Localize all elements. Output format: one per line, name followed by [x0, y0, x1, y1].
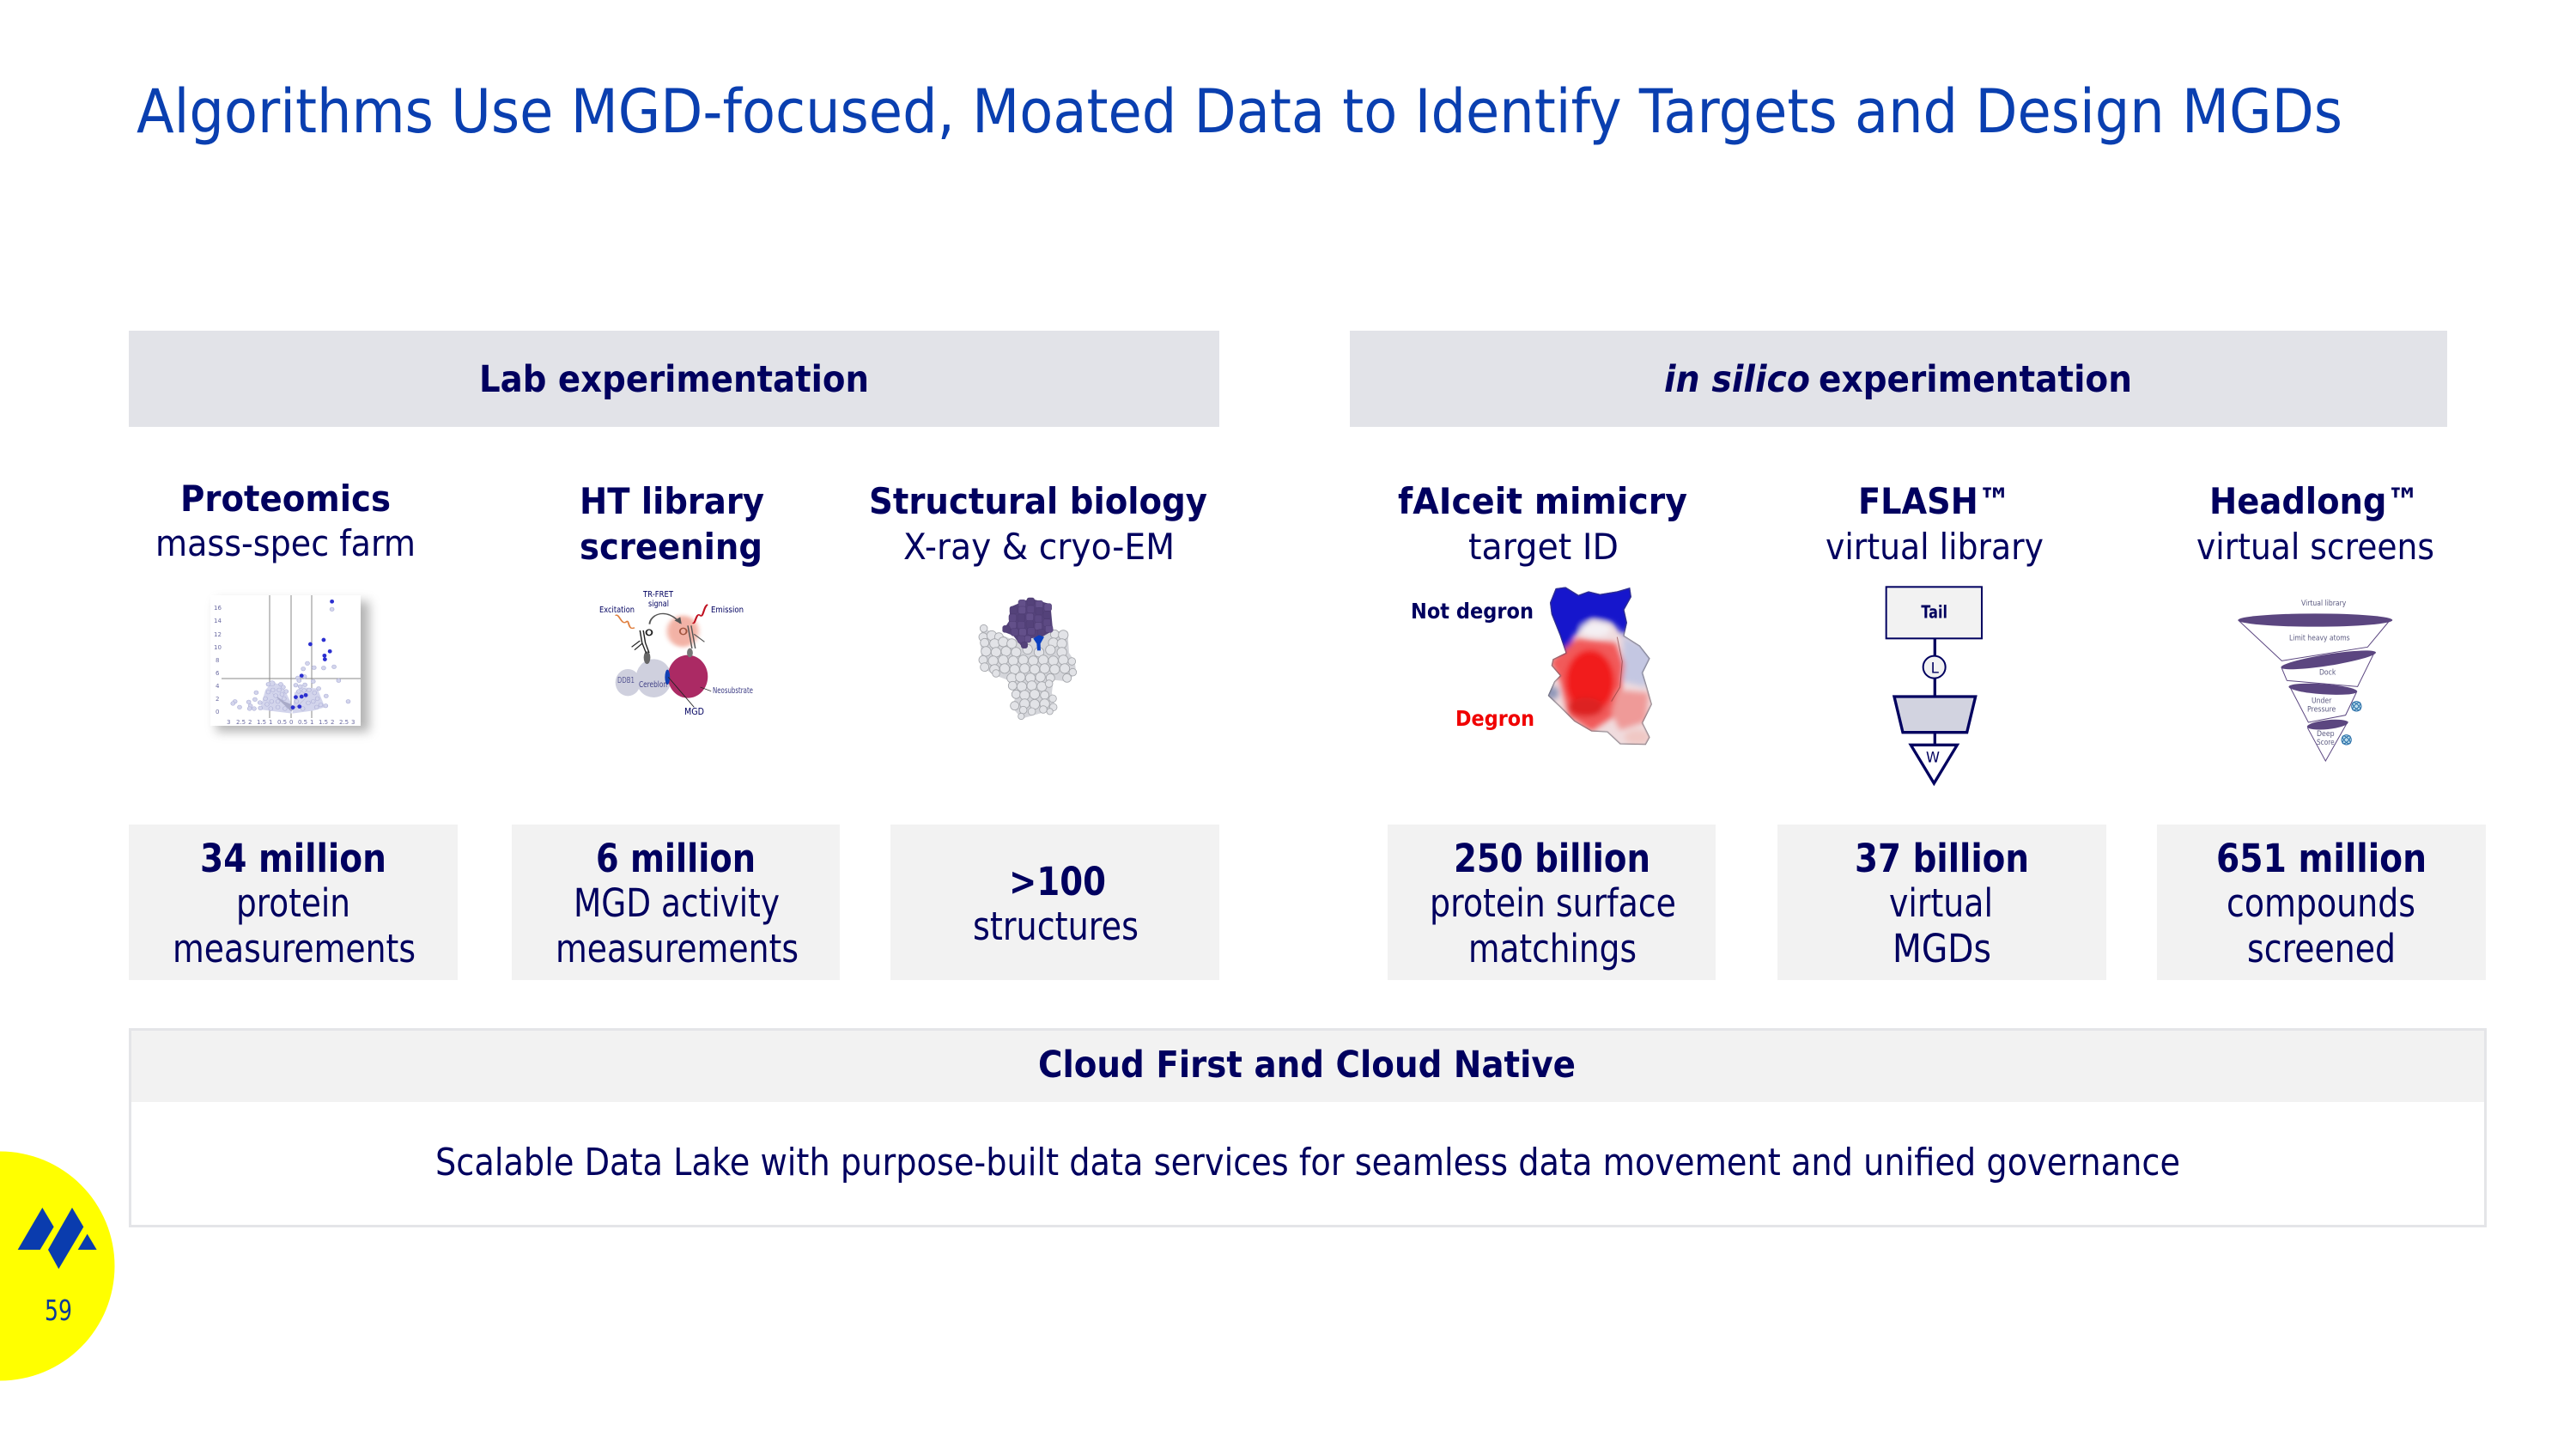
icon: virtual screening funnel: Pressure [2307, 706, 2336, 715]
icon: TR-FRET assay diagram: Emission [711, 606, 744, 615]
icon: TR-FRET assay diagram: DDB1 [617, 676, 635, 685]
icon: FLASH molecule schematic [1886, 587, 1982, 783]
column heading: Headlong [2196, 480, 2434, 568]
icon: volcano plot: 0.5 [277, 719, 287, 726]
icon: volcano plot: 1 [310, 719, 313, 726]
heading: cloud first and cloud native: Cloud First and Cloud Native [1038, 1044, 1576, 1087]
stat box: 651 million: 651 million [2216, 836, 2427, 881]
column heading: HT library screening: screening [580, 526, 762, 568]
stat box: 250 billion: protein surface [1430, 880, 1676, 926]
stat box: 37 billion: virtual [1889, 880, 1993, 926]
icon: electrostatic surface with degron labels [1413, 587, 1652, 746]
stat box: 34 million: protein [236, 880, 350, 926]
linker circle [1923, 656, 1946, 679]
column heading: structural biology: Structural biology [869, 480, 1207, 522]
icon: TR-FRET assay diagram: signal [648, 600, 669, 609]
heading: in silico experimentation: experimentation [1819, 358, 2132, 401]
column heading: structural biology [869, 480, 1207, 568]
icon: virtual screening funnel: Limit heavy atoms [2289, 635, 2350, 643]
icon: volcano plot: 2.5 [236, 719, 246, 726]
icon: volcano plot: 1 [269, 719, 272, 726]
stat box: 37 billion: 37 billion [1855, 836, 2029, 881]
icon: volcano plot: 1.5 [319, 719, 328, 726]
column heading: FLASH: FLASH™ [1858, 480, 2011, 522]
icon: virtual screening funnel: Dock [2319, 669, 2336, 678]
icon: company logo [18, 1208, 97, 1269]
column heading: proteomics [155, 478, 416, 564]
column heading: fAIceit mimicry: fAIceit mimicry [1398, 480, 1687, 522]
label: degron: Degron [1455, 706, 1534, 731]
stat box: more than 100: structures [973, 904, 1139, 949]
icon: TR-FRET assay diagram: Cereblon [639, 680, 667, 690]
stat box: 6 million [512, 825, 840, 980]
column heading: proteomics: mass-spec farm [155, 522, 416, 564]
icon: TR-FRET assay diagram: MGD [684, 706, 704, 717]
page number: 59 [45, 1294, 72, 1327]
stat box: 250 billion: 250 billion [1454, 836, 1650, 881]
icon: protein structure [979, 598, 1077, 720]
icon: volcano plot [210, 595, 369, 732]
icon: volcano plot: 2 [331, 719, 334, 726]
icon: volcano plot: 3 [227, 719, 230, 726]
icon: volcano plot: 16 [214, 605, 222, 612]
panel: lab experimentation header [129, 331, 1219, 427]
icon: volcano plot: 0 [289, 719, 293, 726]
column heading: FLASH: virtual library [1826, 526, 2044, 568]
warhead triangle [1911, 745, 1957, 783]
icon: virtual screening funnel: Score [2317, 739, 2335, 747]
icon: virtual screening funnel: Virtual library [2301, 600, 2346, 608]
stat box: more than 100: >100 [1009, 859, 1106, 904]
column heading: Headlong: Headlong™ [2209, 480, 2420, 522]
warhead triangle: W [1926, 749, 1940, 765]
column heading: structural biology: X-ray & cryo-EM [903, 526, 1175, 568]
icon: volcano plot: 10 [214, 644, 222, 651]
icon: volcano plot: 6 [216, 670, 220, 677]
label: not degron: Not degron [1411, 599, 1534, 624]
stat box: 6 million: 6 million [596, 836, 756, 881]
icon: volcano plot: 0 [216, 709, 219, 715]
stat box: 651 million [2157, 825, 2486, 980]
icon: TR-FRET assay diagram: Neosubstrate [713, 686, 753, 696]
column heading: HT library screening: HT library [580, 480, 764, 522]
icon: volcano plot: 3 [351, 719, 355, 726]
heading: in silico experimentation: in silico [1664, 358, 1810, 401]
icon: TR-FRET assay diagram: TR-FRET [642, 590, 674, 600]
title: Algorithms Use MGD-focused, Moated Data to Identify Targets and Design MGDs [137, 76, 2342, 147]
icon: volcano plot: 0.5 [298, 719, 307, 726]
stat box: 6 million: measurements [556, 926, 799, 971]
icon: volcano plot: 2 [216, 696, 219, 703]
column heading: proteomics: Proteomics [180, 478, 391, 520]
column heading: fAIceit mimicry: target ID [1468, 526, 1619, 568]
stat box: 37 billion [1777, 825, 2106, 980]
column heading: fAIceit mimicry [1398, 480, 1687, 568]
heading: in silico experimentation [1664, 358, 2132, 401]
icon: volcano plot: 8 [216, 657, 219, 664]
column heading: FLASH [1826, 480, 2044, 568]
stat box: 250 billion: matchings [1468, 926, 1637, 971]
panel: cloud first and cloud native [131, 1029, 2485, 1227]
panel: in silico experimentation header [1350, 331, 2447, 427]
icon: virtual screening funnel: Deep [2317, 730, 2335, 739]
text: scalable data lake: Scalable Data Lake with purpose-built data services for seamless data movement and unified governance [435, 1141, 2180, 1184]
surface map [1547, 587, 1652, 746]
icon: volcano plot: 2 [248, 719, 252, 726]
icon: volcano plot: 1.5 [257, 719, 266, 726]
stat box: 651 million: screened [2247, 926, 2396, 971]
stat box: 651 million: compounds [2227, 880, 2415, 926]
column heading: Headlong: virtual screens [2196, 526, 2434, 568]
linker circle: L [1931, 660, 1940, 676]
icon: volcano plot: 4 [216, 683, 220, 690]
label: tail: Tail [1921, 601, 1947, 622]
stat box: more than 100 [890, 825, 1219, 980]
stat box: 6 million: MGD activity [574, 880, 780, 926]
stat box: 250 billion [1388, 825, 1716, 980]
stat box: 34 million: measurements [173, 926, 416, 971]
heading: lab experimentation: Lab experimentation [479, 358, 869, 401]
icon: TR-FRET assay diagram [599, 590, 753, 717]
badge: logo and page number [0, 1151, 115, 1381]
icon: virtual screening funnel [2238, 600, 2392, 761]
icon: virtual screening funnel: Under [2312, 697, 2332, 706]
stat box: 34 million: 34 million [200, 836, 386, 881]
icon: volcano plot: 14 [214, 618, 222, 624]
icon: volcano plot: 12 [214, 631, 222, 638]
stat box: 37 billion: MGDs [1893, 926, 1991, 971]
icon: TR-FRET assay diagram: Excitation [599, 606, 635, 615]
column heading: HT library screening [580, 480, 764, 568]
icon: volcano plot: 2.5 [339, 719, 349, 726]
stat box: 34 million [129, 825, 458, 980]
